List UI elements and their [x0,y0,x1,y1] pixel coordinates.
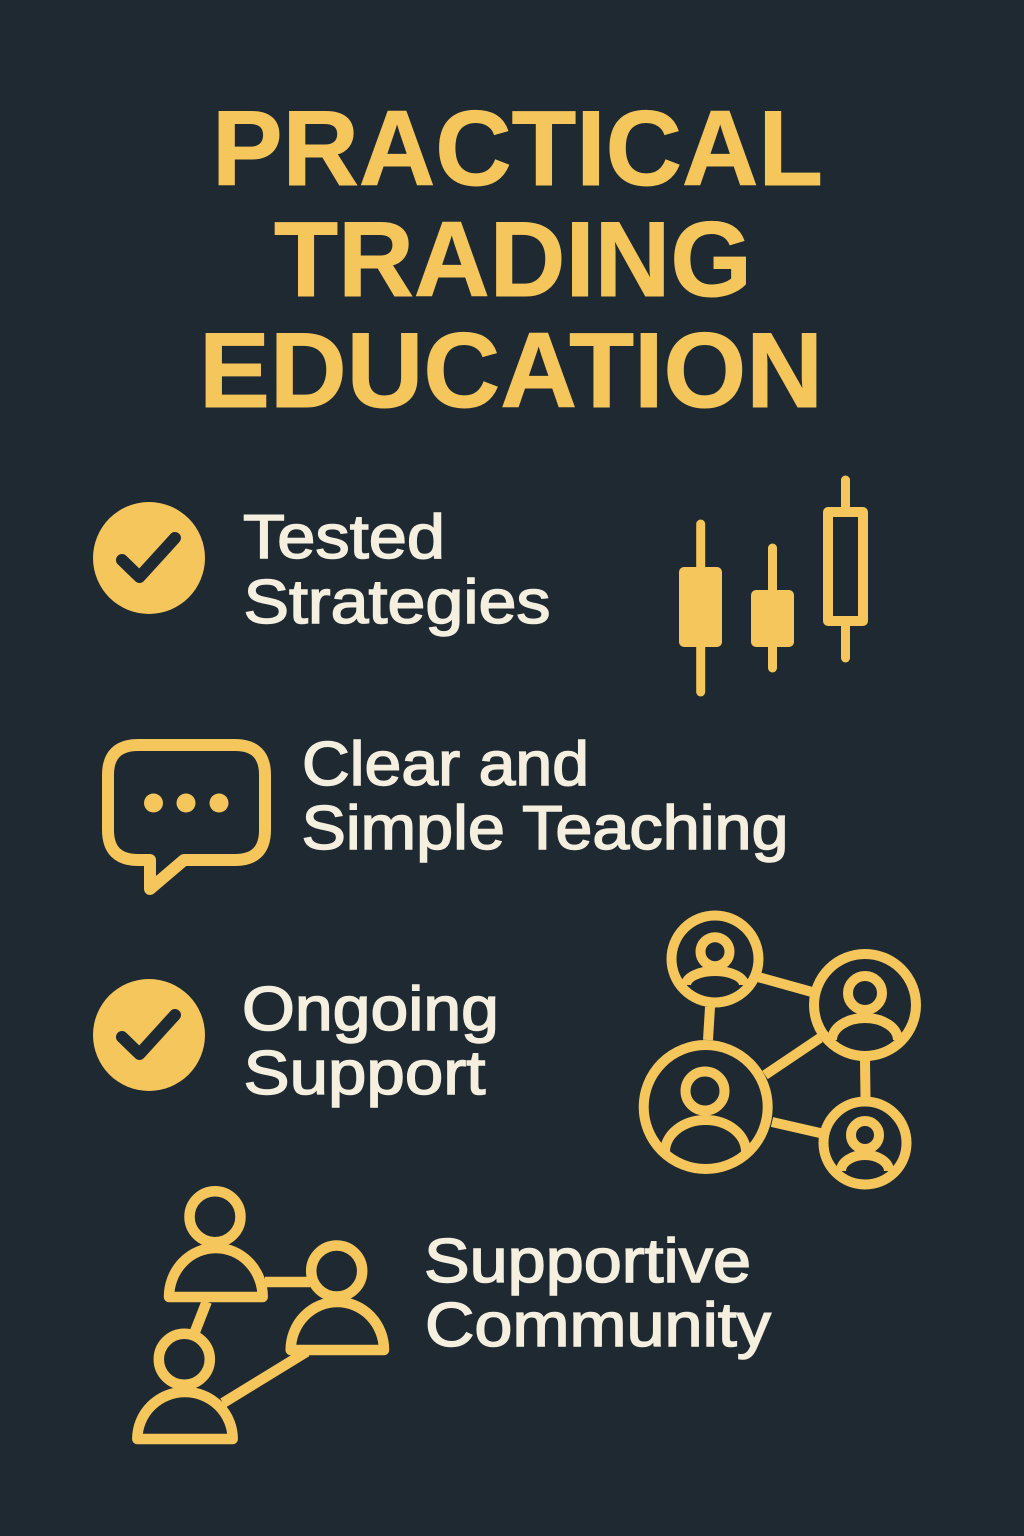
text: tested strategies: Strategies [244,568,550,637]
title: TRADING [274,199,752,319]
title [199,88,823,430]
text: clear and simple teaching: Simple Teaching [302,794,788,863]
text: ongoing support: Ongoing [242,975,499,1044]
text: tested strategies: Tested [243,503,445,572]
text: ongoing support: Support [244,1039,486,1108]
text: tested strategies [243,503,550,637]
text: ongoing support [242,975,499,1108]
text: supportive community: Community [425,1291,771,1360]
icon: check badge, tested strategies [93,502,205,614]
icon: people network [644,916,916,1184]
text: supportive community: Supportive [424,1227,751,1296]
text: clear and simple teaching [302,730,788,863]
icon: check badge, ongoing support [93,979,205,1091]
title: PRACTICAL [212,88,823,208]
icon: community group [137,1191,384,1439]
text: supportive community [424,1227,771,1360]
icon: speech bubble [108,745,265,889]
title: EDUCATION [199,310,823,430]
icon: candlestick chart [679,480,863,692]
text: clear and simple teaching: Clear and [302,730,589,799]
